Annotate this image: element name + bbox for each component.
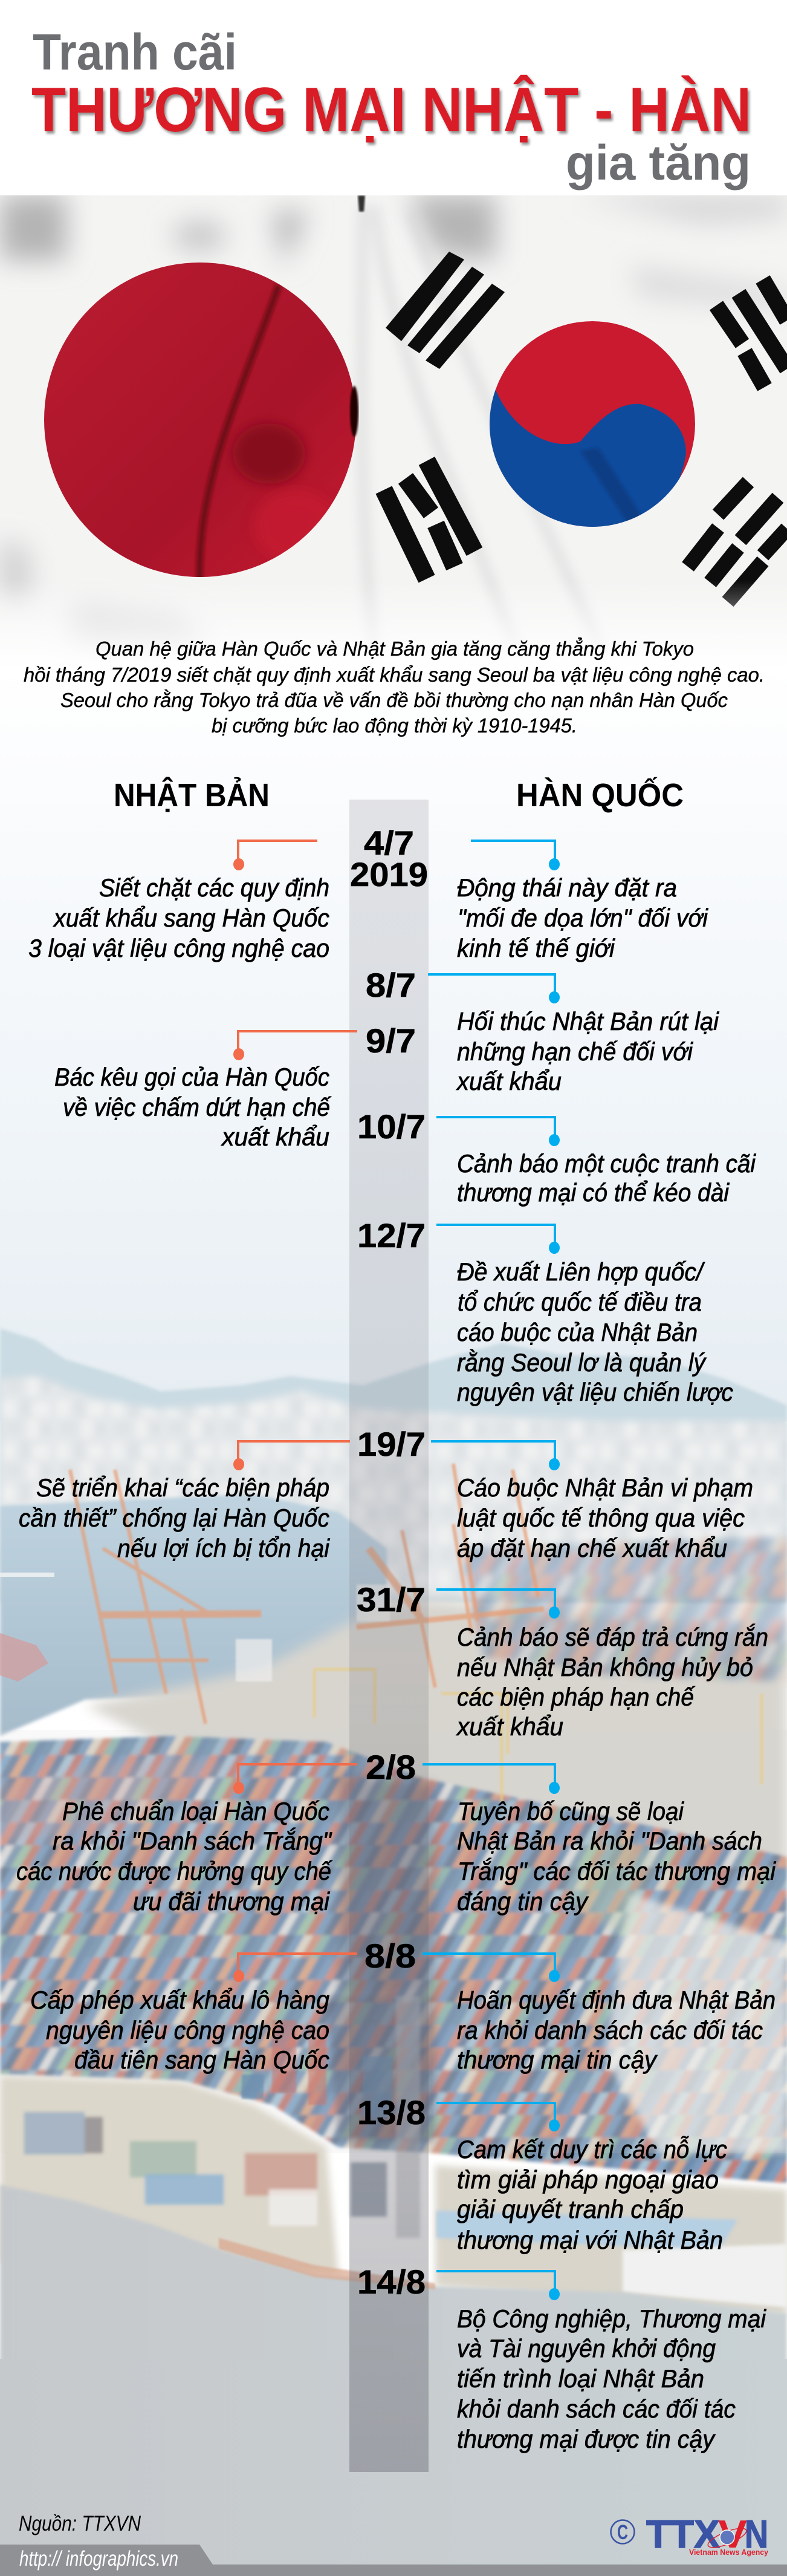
Korea entry 4/7 (457, 873, 709, 962)
Korea entry 8/7: xuất khẩu (456, 1067, 562, 1095)
Japan entry 2/8: các nước được hưởng quy chế (16, 1857, 332, 1885)
Japan entry 4/7 (28, 873, 329, 962)
Korea entry 12/7: Đề xuất Liên hợp quốc/ (457, 1257, 705, 1286)
Japan entry 19/7: Sẽ triển khai “các biện pháp (36, 1473, 329, 1502)
timeline dates: 12/7 (357, 1216, 426, 1254)
Japan entry 9/7: xuất khẩu (221, 1123, 329, 1151)
Korea entry 14/8: khỏi danh sách các đối tác (457, 2395, 736, 2423)
Japan entry 2/8 (16, 1797, 332, 1916)
Korea entry 19/7 (457, 1473, 753, 1562)
title line 1: Tranh cãi (33, 24, 237, 80)
Japan entry 19/7 (19, 1473, 331, 1562)
Japan entry 9/7: về việc chấm dứt hạn chế (63, 1093, 331, 1121)
timeline dates: 4/7 (364, 824, 414, 862)
column heading: Korea: HÀN QUỐC (516, 777, 684, 814)
Korea entry 12/7 (457, 1257, 733, 1406)
timeline dates: 31/7 (357, 1580, 426, 1619)
timeline dates: 14/8 (357, 2263, 426, 2301)
Korea entry 12/7: tổ chức quốc tế điều tra (458, 1288, 702, 1316)
icon: globe (706, 2525, 748, 2551)
Korea entry 8/7: những hạn chế đối với (457, 1037, 694, 1066)
logo: TTXVN: V (718, 2512, 747, 2556)
Korea entry 19/7: Cáo buộc Nhật Bản vi phạm (457, 1473, 753, 1502)
icon: copyright (610, 2520, 635, 2544)
Korea entry 14/8: và Tài nguyên khởi động (457, 2334, 716, 2362)
icon: copyright: C (617, 2521, 628, 2544)
Korea entry 2/8: Trắng" các đối tác thương mại (458, 1857, 777, 1885)
Korea entry 2/8: Nhật Bản ra khỏi "Danh sách (457, 1827, 762, 1855)
timeline dates: 2019 (350, 855, 428, 893)
timeline dates: 9/7 (366, 1022, 416, 1060)
Korea entry 31/7: nếu Nhật Bản không hủy bỏ (457, 1653, 753, 1681)
Japan entry 19/7: nếu lợi ích bị tổn hại (117, 1534, 331, 1562)
Japan entry 2/8: ra khỏi "Danh sách Trắng" (53, 1827, 332, 1855)
timeline dates (350, 824, 428, 2301)
Korea entry 13/8: thương mại với Nhật Bản (457, 2226, 723, 2254)
Korea entry 19/7: luật quốc tế thông qua việc (457, 1504, 745, 1532)
icon: taegeuk (484, 321, 695, 532)
logo: TTXVN: N (745, 2512, 768, 2556)
icon: Korean trigram top right (716, 279, 787, 387)
timeline dates: 10/7 (357, 1107, 426, 1146)
timeline dates: 2/8 (366, 1748, 416, 1786)
icon: Korean trigram top left (386, 252, 505, 369)
connectors: Korea side (blue) (423, 841, 560, 2300)
background photo: port scene (0, 665, 787, 2576)
Korea entry 4/7: Động thái này đặt ra (457, 873, 677, 902)
Korea entry 12/7: nguyên vật liệu chiến lược (457, 1378, 733, 1406)
intro paragraph: bị cưỡng bức lao động thời kỳ 1910-1945. (212, 714, 577, 737)
Japan entry 2/8: ưu đãi thương mại (133, 1887, 331, 1916)
Korea entry 19/7: áp đặt hạn chế xuất khẩu (457, 1534, 727, 1562)
Korea entry 31/7: Cảnh báo sẽ đáp trả cứng rắn (457, 1623, 768, 1651)
Korea entry 13/8: tìm giải pháp ngoại giao (457, 2165, 719, 2194)
central timeline bar (349, 800, 429, 2472)
Korea entry 14/8: thương mại được tin cậy (457, 2425, 716, 2453)
Korea entry 2/8: Tuyên bố cũng sẽ loại (458, 1797, 685, 1825)
website url: http:// infographics.vn (19, 2547, 178, 2571)
Korea entry 12/7: rằng Seoul lơ là quản lý (457, 1348, 707, 1377)
hero image: Japanese and Korean flags (0, 195, 787, 668)
Korea entry 10/7: Cảnh báo một cuộc tranh cãi (457, 1149, 757, 1178)
intro paragraph: hồi tháng 7/2019 siết chặt quy định xuất khẩu sang Seoul ba vật liệu công nghệ cao. (24, 664, 765, 686)
timeline dates: 19/7 (357, 1425, 426, 1463)
intro paragraph: Quan hệ giữa Hàn Quốc và Nhật Bản gia tăng căng thẳng khi Tokyo (96, 637, 694, 660)
footer banner (0, 2545, 787, 2576)
Japan entry 4/7: Siết chặt các quy định (99, 873, 329, 902)
Korea entry 31/7: các biện pháp hạn chế (457, 1683, 695, 1711)
Korea entry 12/7: cáo buộc của Nhật Bản (457, 1318, 698, 1346)
Korea entry 8/7 (456, 1007, 720, 1095)
Korea entry 13/8: Cam kết duy trì các nỗ lực (457, 2135, 727, 2164)
intro paragraph (24, 637, 765, 737)
Korea entry 14/8: tiến trình loại Nhật Bản (457, 2364, 704, 2393)
Korea entry 14/8: Bộ Công nghiệp, Thương mại (457, 2304, 767, 2333)
Korea entry 8/8: thương mại tin cậy (457, 2046, 658, 2074)
Korea entry 4/7: kinh tế thế giới (457, 934, 616, 962)
title line 3: gia tăng (566, 135, 751, 191)
Japan entry 8/8 (30, 1986, 329, 2074)
Japan entry 9/7: Bác kêu gọi của Hàn Quốc (54, 1063, 329, 1091)
Japan entry 8/8: nguyên liệu công nghệ cao (46, 2016, 329, 2044)
Korea entry 31/7 (456, 1623, 768, 1741)
icon: Korean trigram bottom left (384, 461, 474, 579)
Japan entry 8/8: Cấp phép xuất khẩu lô hàng (30, 1986, 329, 2014)
logo: TTXVN: Vietnam News Agency (689, 2548, 769, 2557)
Japan entry 2/8: Phê chuẩn loại Hàn Quốc (62, 1797, 329, 1825)
Korea entry 8/7: Hối thúc Nhật Bản rút lại (457, 1007, 720, 1035)
Korea entry 31/7: xuất khẩu (456, 1712, 563, 1741)
logo: TTXVN: TTX (646, 2512, 720, 2556)
Korea entry 8/8 (457, 1986, 776, 2074)
source note: Nguồn: TTXVN (19, 2512, 141, 2535)
icon: Korean trigram bottom right (688, 482, 787, 602)
column heading: Japan: NHẬT BẢN (114, 777, 270, 814)
Japan entry 9/7 (54, 1063, 331, 1151)
Korea entry 2/8 (457, 1797, 777, 1916)
Japan entry 19/7: cần thiết” chống lại Hàn Quốc (19, 1504, 329, 1532)
Korea entry 10/7 (457, 1149, 757, 1207)
timeline dates: 8/7 (366, 966, 416, 1004)
Korea entry 14/8 (457, 2304, 767, 2453)
intro paragraph: Seoul cho rằng Tokyo trả đũa về vấn đề bồi thường cho nạn nhân Hàn Quốc (60, 689, 728, 711)
header block: title (31, 24, 751, 191)
Korea entry 8/8: ra khỏi danh sách các đối tác (457, 2016, 763, 2044)
Japan entry 4/7: xuất khẩu sang Hàn Quốc (53, 904, 329, 932)
Korea entry 13/8 (457, 2135, 727, 2254)
Japan entry 4/7: 3 loại vật liệu công nghệ cao (28, 934, 329, 962)
connectors: Japan side (orange) (233, 841, 357, 1982)
Korea entry 10/7: thương mại có thể kéo dài (457, 1178, 730, 1207)
Korea entry 2/8: đáng tin cậy (457, 1887, 589, 1916)
Korea entry 4/7: "mối đe dọa lớn" đối với (458, 904, 709, 932)
timeline dates: 8/8 (364, 1937, 416, 1975)
icon: Japanese red disc (36, 254, 363, 587)
logo: TTXVN (610, 2512, 769, 2557)
Japan entry 8/8: đầu tiên sang Hàn Quốc (74, 2046, 329, 2074)
timeline dates: 13/8 (357, 2093, 426, 2131)
Korea entry 13/8: giải quyết tranh chấp (457, 2195, 684, 2223)
